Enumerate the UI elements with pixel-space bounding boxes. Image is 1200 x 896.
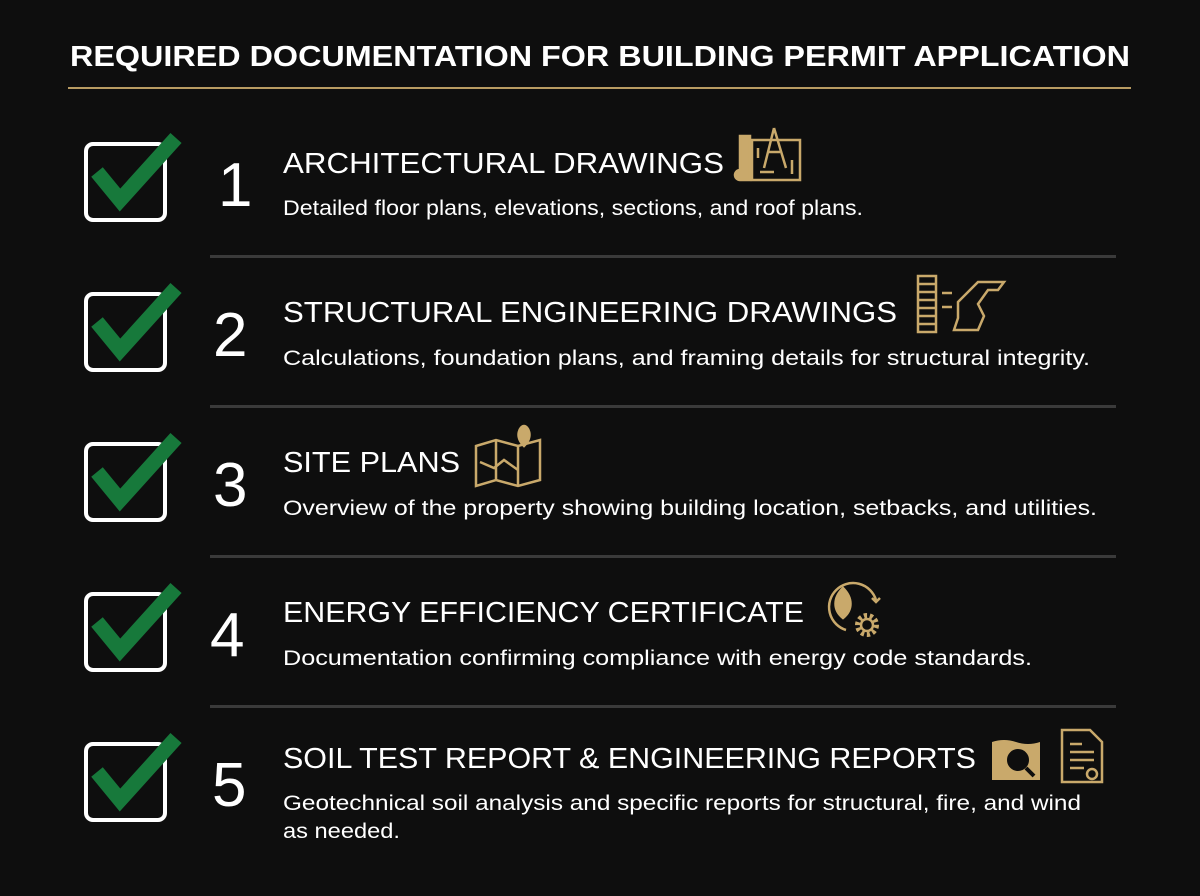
checkbox 5 [86,738,176,820]
item 2: structural [86,276,1090,370]
item 5: soil test: as needed. [283,820,400,843]
heading 3: SITE PLANS [283,447,460,479]
description 5: Geotechnical soil analysis and specific reports for structural, fire, and wind [283,792,1081,815]
icon: leaf gear [829,583,880,634]
number 3: 3 [213,451,247,520]
checkbox 1 [86,138,176,220]
item 3: site plans [86,426,1097,520]
description 4: Documentation confirming compliance with energy code standards. [283,647,1032,670]
item 1: architectural drawings [86,128,863,220]
number 2: 2 [213,301,247,370]
heading 5: SOIL TEST REPORT & ENGINEERING REPORTS [283,743,976,775]
heading 4: ENERGY EFFICIENCY CERTIFICATE [283,597,804,629]
title: REQUIRED DOCUMENTATION FOR BUILDING PERMIT APPLICATION [70,41,1130,73]
checkbox 2 [86,288,176,370]
number 1: 1 [218,151,252,220]
number 4: 4 [210,601,244,670]
heading 1: ARCHITECTURAL DRAWINGS [283,148,724,180]
item 5: soil test [86,730,1102,843]
icon: steel beam [918,276,1004,332]
checkbox 3 [86,438,176,520]
icon: document [1062,730,1102,782]
number 5: 5 [212,751,246,820]
icon: map pin [476,426,540,486]
description 1: Detailed floor plans, elevations, sections, and roof plans. [283,197,863,220]
description 2: Calculations, foundation plans, and framing details for structural integrity. [283,347,1090,370]
heading 2: STRUCTURAL ENGINEERING DRAWINGS [283,297,897,329]
description 3: Overview of the property showing building location, setbacks, and utilities. [283,497,1097,520]
checkbox 4 [86,588,176,670]
icon: soil sample [992,740,1040,780]
icon: blueprint [735,128,800,180]
item 4: energy [86,583,1032,670]
